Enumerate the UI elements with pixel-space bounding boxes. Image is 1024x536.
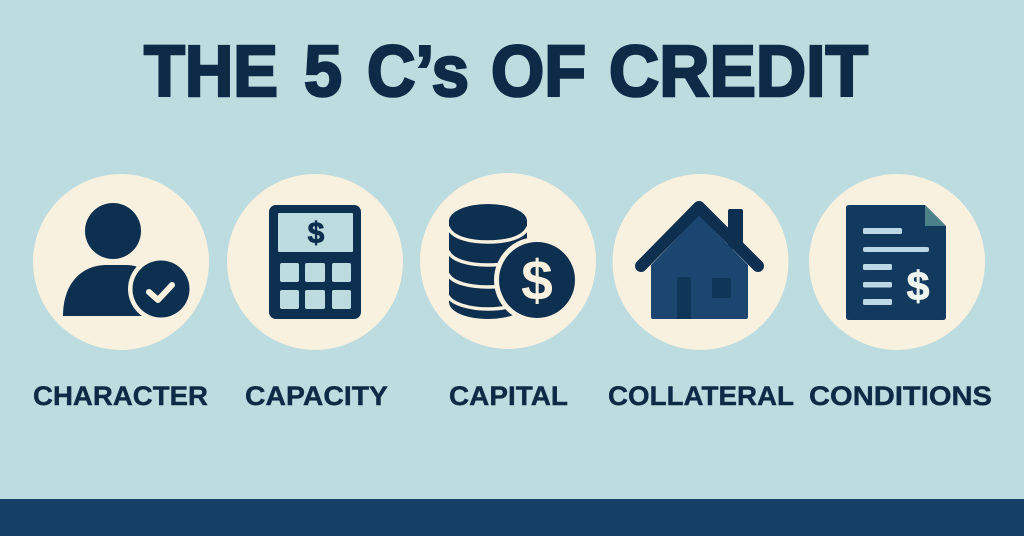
title: OF — [491, 32, 586, 112]
circle background — [612, 174, 788, 350]
label: character: CHARACTER — [33, 381, 208, 411]
label: capacity: CAPACITY — [245, 381, 388, 411]
title: 5 — [304, 32, 342, 112]
icon: calculator: $ — [308, 217, 325, 250]
panel: collateral — [612, 174, 788, 350]
label: collateral: COLLATERAL — [608, 381, 794, 411]
icon: house — [641, 207, 758, 319]
circle background — [227, 174, 403, 350]
icon: document with dollar — [846, 205, 946, 320]
circle background — [809, 174, 985, 350]
title: C’s — [367, 32, 469, 112]
title — [144, 32, 868, 112]
icon: coin stack with dollar coin — [448, 204, 580, 323]
icon: person with check badge — [63, 203, 194, 322]
title: CREDIT — [609, 32, 868, 112]
circle background — [33, 174, 209, 350]
panel: conditions — [809, 174, 985, 350]
icon: calculator — [269, 205, 361, 319]
label: conditions: CONDITIONS — [809, 381, 992, 411]
icon: coin stack with dollar coin: $ — [521, 249, 553, 313]
panel: character — [33, 174, 209, 350]
label: capital: CAPITAL — [449, 381, 568, 411]
circle background — [420, 173, 596, 349]
title: THE — [144, 32, 278, 112]
panel: capital — [420, 173, 596, 349]
icon: document with dollar: $ — [907, 263, 930, 309]
panel: capacity — [227, 174, 403, 350]
footer band — [0, 499, 1024, 536]
